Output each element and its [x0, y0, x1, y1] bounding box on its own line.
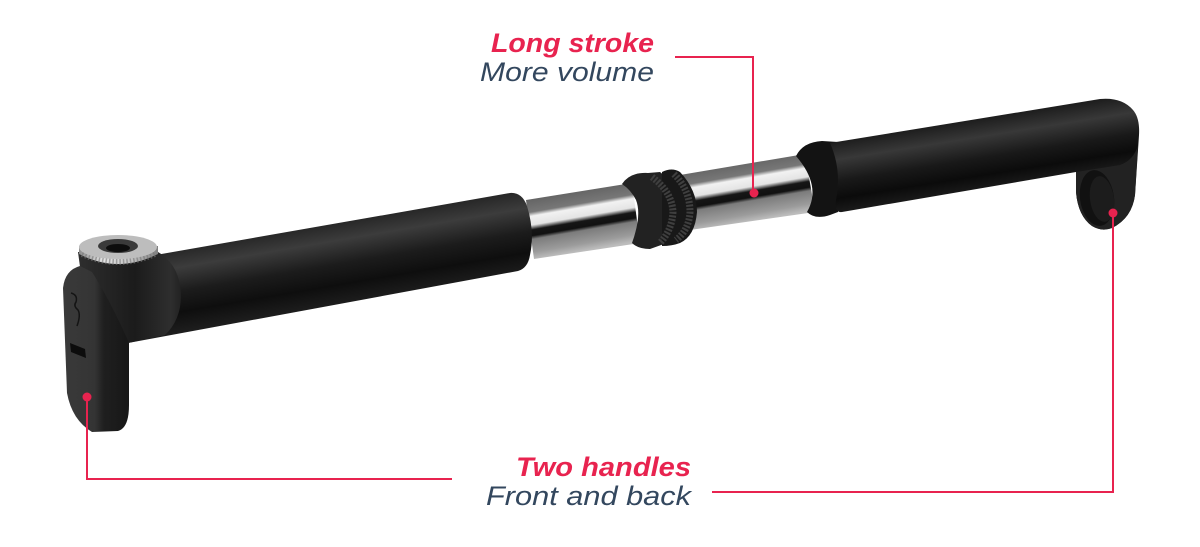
head body [78, 252, 181, 343]
heading: long stroke: Long stroke [491, 28, 654, 58]
subheading: front and back: Front and back [486, 481, 693, 511]
right tube and handle [830, 99, 1139, 230]
leader line: long stroke [675, 57, 753, 193]
chrome shaft left [526, 183, 640, 259]
leader line: left handle [87, 397, 452, 479]
knurled valve ring [79, 235, 158, 264]
handle logo mark [71, 293, 79, 326]
marker dot: right handle [1108, 208, 1118, 218]
marker dot: left handle [82, 392, 92, 402]
subheading: more volume: More volume [480, 57, 654, 87]
leader line: right handle [712, 213, 1113, 492]
lock rings [622, 170, 697, 249]
pump illustration [63, 99, 1139, 432]
handle slot [70, 343, 86, 358]
left handle [63, 266, 129, 432]
left tube [120, 193, 532, 343]
heading: two handles: Two handles [516, 452, 691, 482]
right handle recess [1076, 168, 1118, 228]
right collar [796, 141, 838, 217]
right handle lower shell [1076, 145, 1138, 230]
callout: long stroke [480, 28, 758, 198]
marker dot: shaft [750, 188, 758, 198]
callout: two handles [82, 208, 1118, 511]
chrome shaft right [680, 154, 815, 230]
